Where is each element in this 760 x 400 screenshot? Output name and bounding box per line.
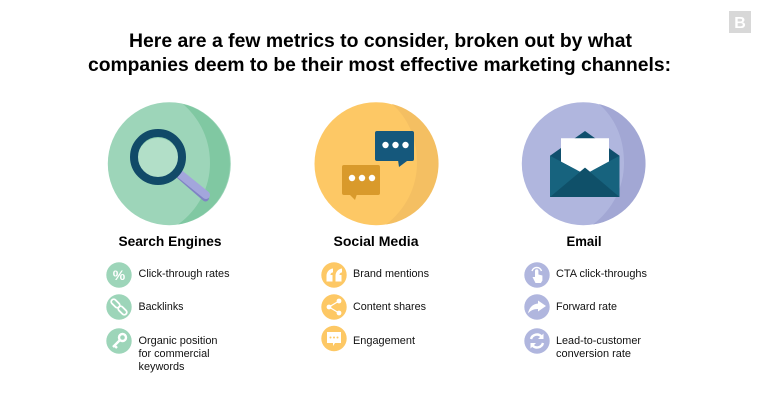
metric: engagement: Engagement: [353, 335, 415, 347]
title: Here are a few metrics to consider, broken out by what: [129, 30, 632, 52]
metric: organic position: keywords: [138, 361, 185, 373]
title: [88, 30, 671, 76]
logo badge: B: [734, 15, 746, 32]
panel: social media: [314, 102, 439, 351]
metric: lead-to-customer conversion rate: Lead-to-customer: [556, 335, 641, 347]
metric: content shares: Content shares: [353, 301, 426, 313]
metric: forward rate: Forward rate: [556, 301, 617, 313]
metric: organic position: for commercial: [138, 348, 210, 360]
heading: search engines: Search Engines: [118, 234, 222, 249]
metric: organic position: Organic position: [138, 335, 218, 347]
metric: brand mentions: [321, 262, 429, 288]
icon: chat bubbles in yellow circle: [314, 102, 439, 225]
metric: click-through rates: [106, 262, 230, 288]
metric: cta click-throughs: CTA click-throughs: [556, 268, 647, 280]
title: companies deem to be their most effective marketing channels:: [88, 54, 671, 76]
icon: magnifying glass in green circle: [108, 102, 231, 225]
metric: content shares: [321, 294, 426, 320]
panel: email: [522, 102, 647, 360]
metric: engagement: [321, 326, 415, 351]
metric: lead-to-customer conversion rate: [524, 328, 641, 360]
metric: cta click-throughs: [524, 262, 647, 288]
logo badge: [729, 11, 751, 33]
heading: email: Email: [566, 234, 602, 249]
metric: backlinks: [106, 294, 184, 320]
metric: backlinks: Backlinks: [138, 301, 184, 313]
metric: click-through rates: %: [113, 267, 126, 283]
icon: open envelope in purple circle: [522, 102, 646, 225]
metric: lead-to-customer conversion rate: conversion rate: [556, 348, 631, 360]
heading: social media: Social Media: [334, 234, 419, 249]
metric: organic position: [106, 328, 218, 373]
metric: click-through rates: Click-through rates: [138, 268, 230, 280]
metric: brand mentions: Brand mentions: [353, 268, 429, 280]
panel: search engines: [106, 102, 231, 373]
metric: forward rate: [524, 294, 617, 320]
